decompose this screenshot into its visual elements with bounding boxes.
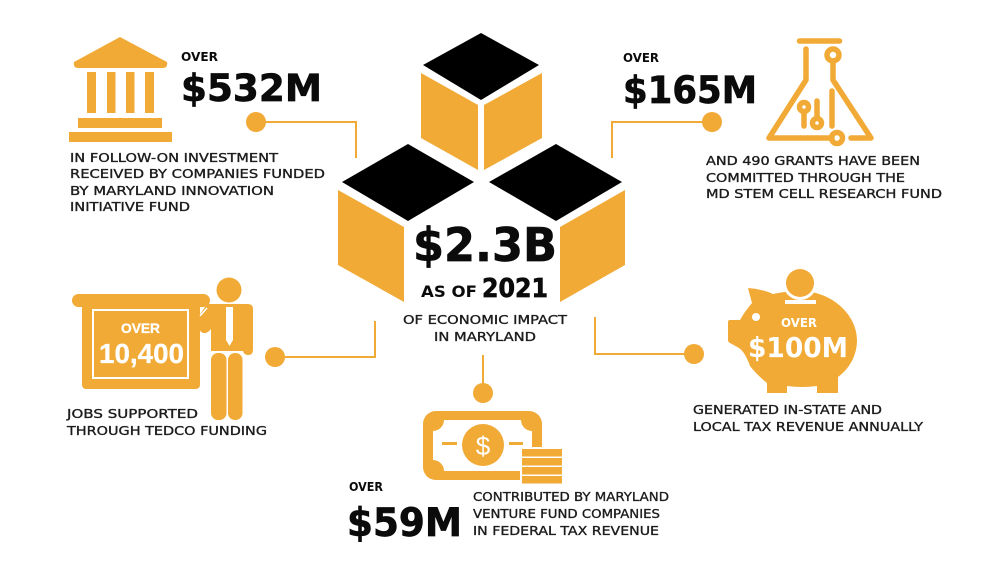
headline: as of year: AS OF — [421, 282, 477, 301]
headline: as of year — [421, 274, 548, 304]
headline: as of year: 2021 — [482, 274, 548, 304]
stat: 10,400 jobs: 10,400 — [99, 338, 184, 369]
text: economic impact caption — [403, 312, 567, 344]
panel: stem cell grants — [612, 41, 942, 201]
text: over label on board: OVER — [121, 320, 160, 336]
text: over label: OVER — [623, 50, 659, 65]
text: tax revenue description — [693, 402, 923, 434]
stat: 532 million: $532M — [181, 67, 322, 110]
stat: 59 million: $59M — [347, 501, 462, 546]
panel: follow-on investment — [69, 37, 356, 214]
stat: 100 million: $100M — [748, 331, 848, 364]
text: investment description: RECEIVED BY COMPANIES FUNDED — [70, 166, 325, 181]
connector: tax revenue — [595, 317, 704, 364]
text: over label on pig: OVER — [781, 315, 817, 330]
text: jobs description: THROUGH TEDCO FUNDING — [66, 423, 267, 438]
connector: investment — [246, 112, 356, 158]
text: grants description — [706, 153, 942, 201]
connector: jobs — [265, 321, 375, 367]
text: federal tax description — [473, 489, 669, 538]
panel: jobs supported — [66, 278, 375, 438]
text: grants description: AND 490 GRANTS HAVE BEEN — [706, 153, 920, 168]
icon: left cube — [338, 144, 474, 302]
text: investment description: INITIATIVE FUND — [70, 199, 190, 214]
text: federal tax description: CONTRIBUTED BY MARYLAND — [473, 489, 669, 504]
panel: tax revenue — [595, 266, 923, 434]
connector: grants — [612, 112, 722, 158]
icon: right cube — [489, 144, 625, 302]
panel: central cubes and headline — [338, 33, 625, 344]
icon: piggy bank — [728, 266, 857, 393]
icon: top cube — [421, 33, 542, 170]
text: economic impact caption: IN MARYLAND — [434, 329, 536, 344]
headline: total impact: $2.3B — [413, 218, 557, 272]
text: over label: OVER — [181, 49, 218, 64]
icon: banknote and coins: $ — [476, 431, 491, 461]
stat: 165 million: $165M — [623, 69, 757, 112]
text: grants description: COMMITTED THROUGH THE — [706, 170, 905, 185]
text: economic impact caption: OF ECONOMIC IMPACT — [403, 312, 567, 327]
text: over label: OVER — [349, 479, 383, 494]
icon: flask — [769, 41, 871, 144]
text: tax revenue description: LOCAL TAX REVENUE ANNUALLY — [693, 419, 923, 434]
icon: bank building — [69, 37, 172, 142]
text: tax revenue description: GENERATED IN-STATE AND — [693, 402, 882, 417]
text: federal tax description: IN FEDERAL TAX REVENUE — [473, 523, 659, 538]
text: investment description: BY MARYLAND INNOVATION — [70, 183, 274, 198]
text: jobs description — [66, 406, 267, 438]
icon: presenter with board — [72, 278, 253, 420]
connector: federal tax — [473, 355, 493, 403]
text: investment description: IN FOLLOW-ON INVESTMENT — [70, 150, 278, 165]
text: jobs description: JOBS SUPPORTED — [66, 406, 198, 421]
icon: banknote and coins — [423, 411, 564, 485]
text: grants description: MD STEM CELL RESEARCH FUND — [706, 186, 942, 201]
text: federal tax description: VENTURE FUND COMPANIES — [473, 506, 660, 521]
panel: federal tax revenue — [347, 355, 669, 546]
text: investment description — [70, 150, 325, 214]
